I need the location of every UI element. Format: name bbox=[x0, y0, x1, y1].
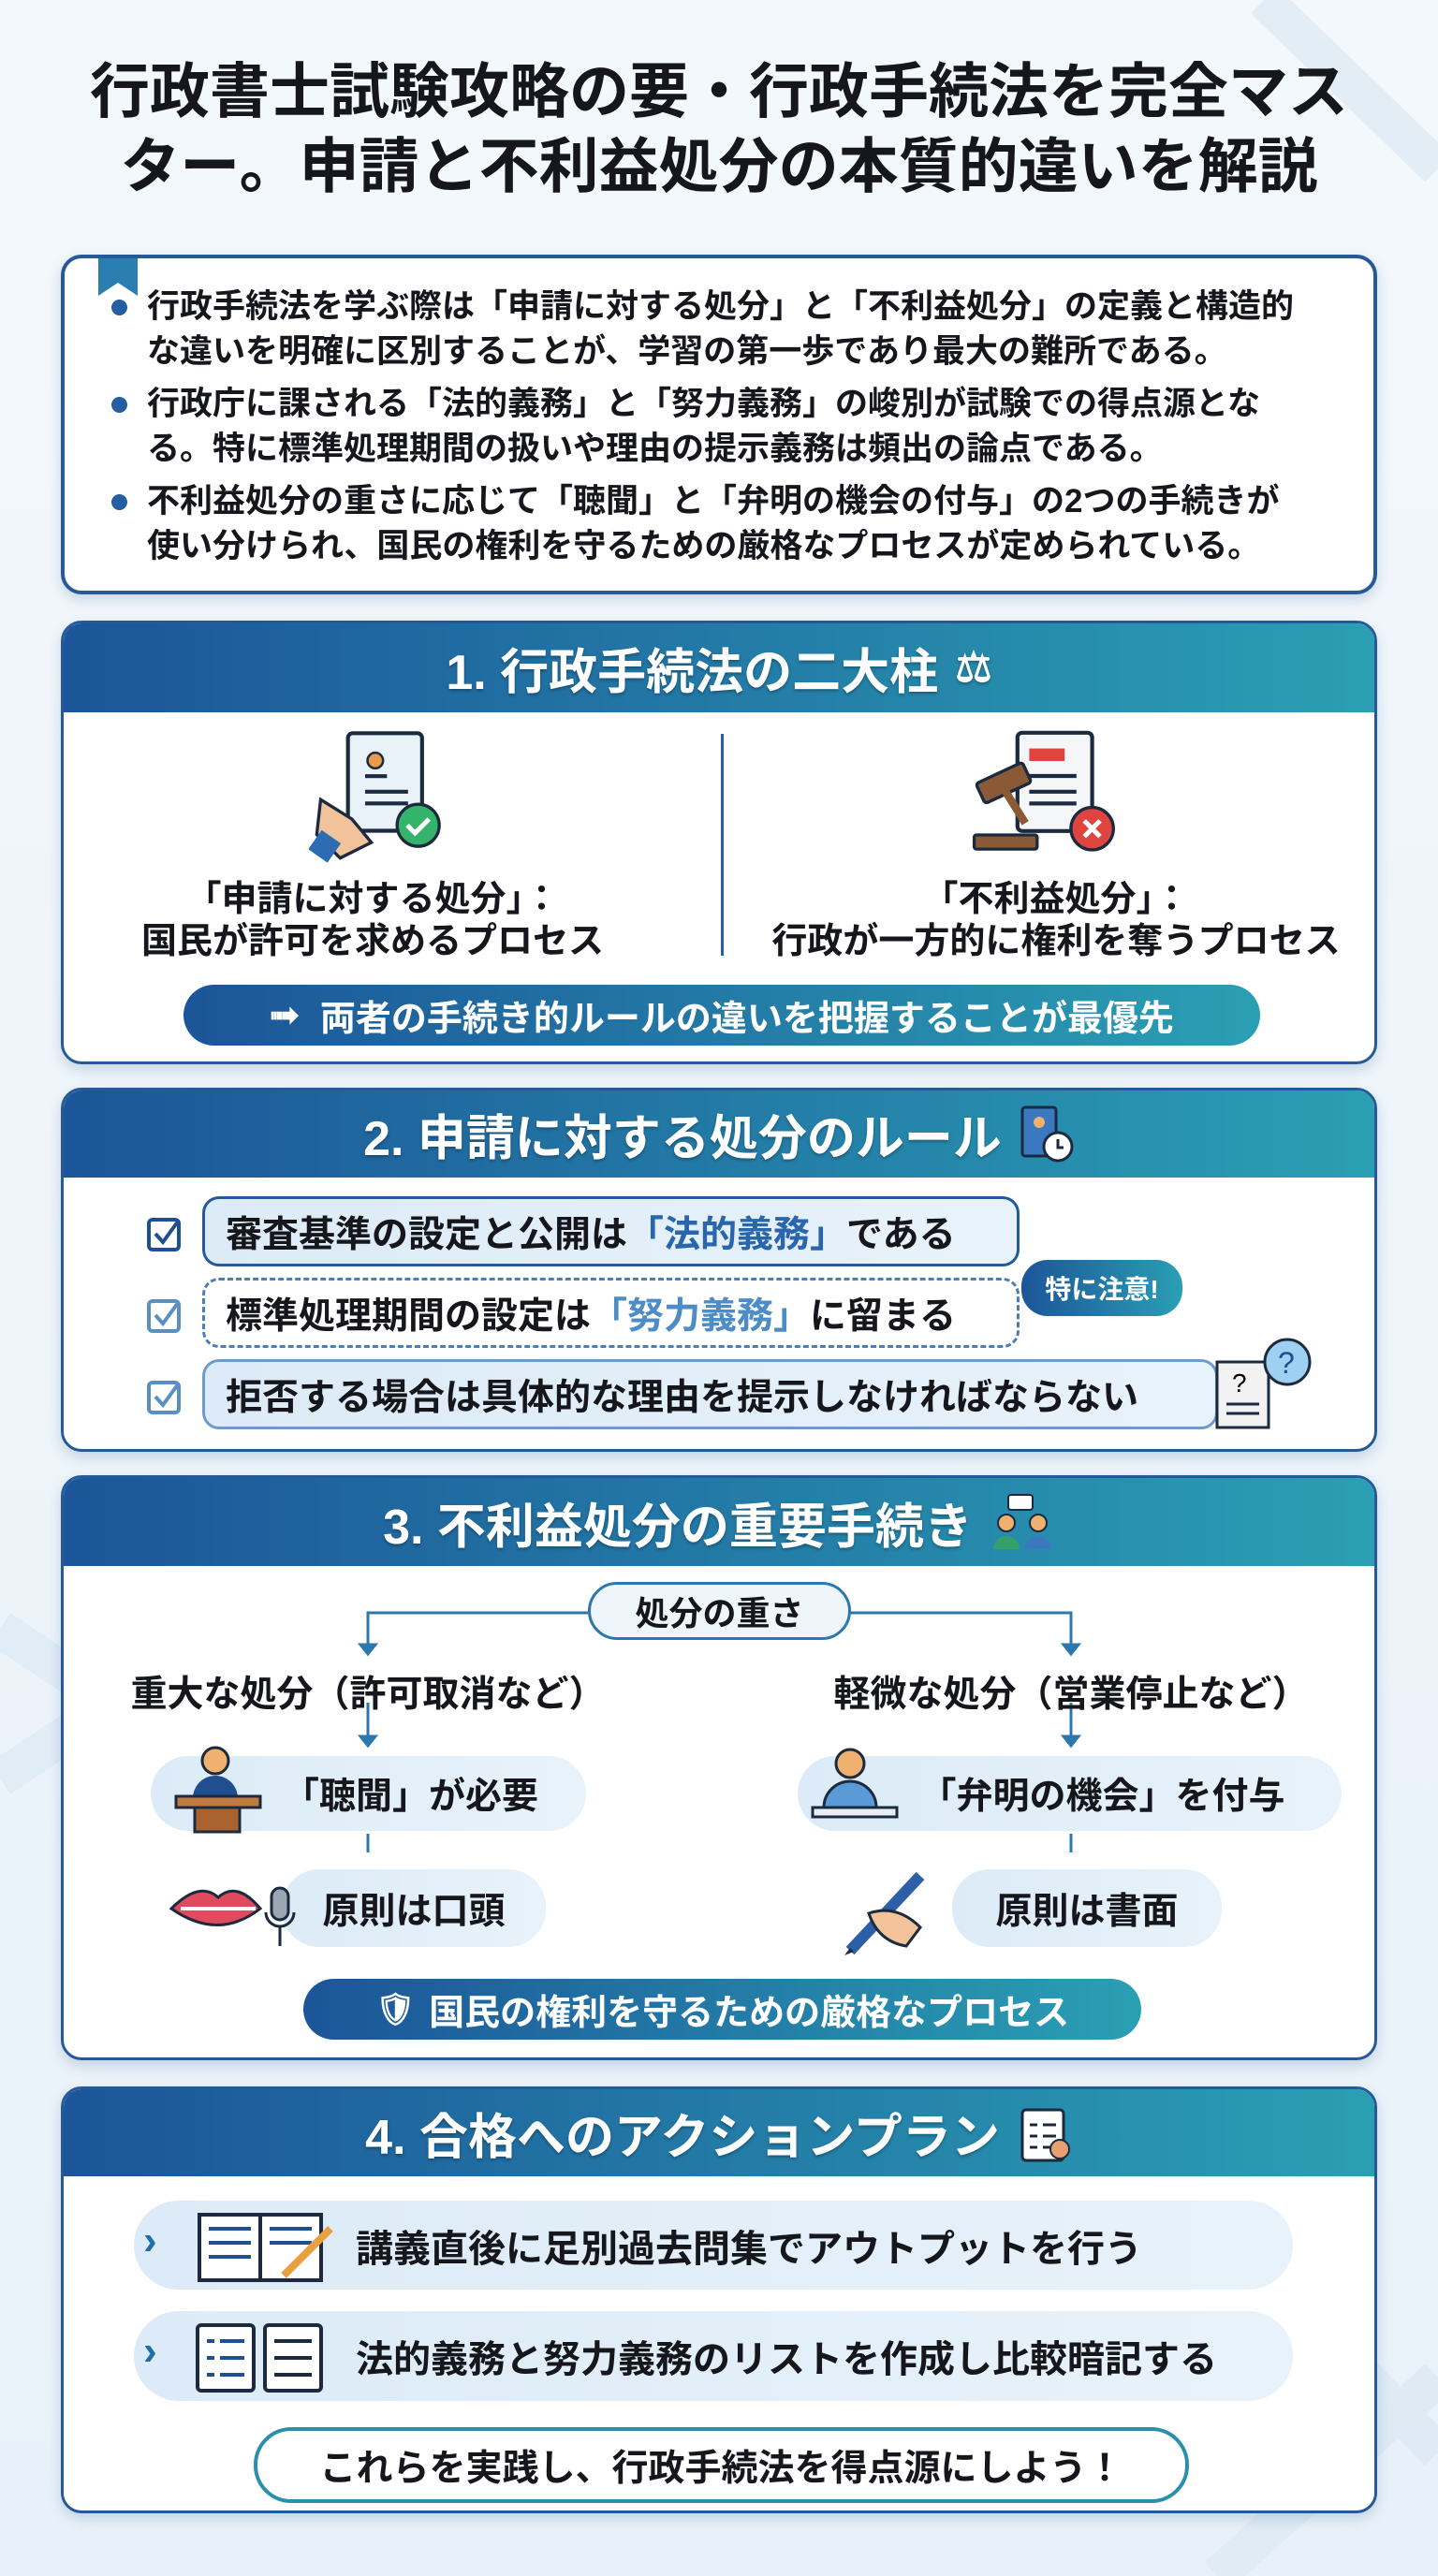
summary bullets bbox=[111, 288, 1294, 564]
callout: special attention bbox=[1021, 1260, 1182, 1316]
heading 2 bbox=[64, 1090, 1374, 1178]
written pill: 原則は書面 bbox=[995, 1891, 1178, 1932]
heading 1: ⚖ bbox=[955, 645, 992, 691]
icon: bookmark bbox=[98, 258, 138, 296]
text: serious disposition: 重大な処分（許可取消など） bbox=[130, 1675, 605, 1715]
summary bullets: 使い分けられ、国民の権利を守るための厳格なプロセスが定められている。 bbox=[147, 528, 1260, 564]
panel: section 2 bbox=[61, 1088, 1377, 1452]
callout pill: 両者の手続き的ルールの違いを把握することが最優先 bbox=[320, 1000, 1174, 1039]
rights pill bbox=[303, 1979, 1141, 2040]
summary bullets: な違いを明確に区別することが、学習の第一歩であり最大の難所である。 bbox=[147, 333, 1227, 370]
rights pill: 🛡 bbox=[375, 1992, 416, 2027]
explanation pill: 「弁明の機会」を付与 bbox=[919, 1777, 1284, 1817]
text: disadvantageous caption: 「不利益処分」： bbox=[922, 880, 1189, 919]
rights pill: 国民の権利を守るための厳格なプロセス bbox=[429, 1994, 1069, 2033]
hearing pill bbox=[151, 1756, 586, 1831]
rule 2: 「努力義務」 bbox=[591, 1295, 810, 1337]
action 1: › bbox=[143, 2217, 157, 2263]
icon: pen hand bbox=[844, 1872, 925, 1955]
icon: person writing bbox=[811, 1749, 899, 1818]
heading 2: 2. 申請に対する処分のルール bbox=[363, 1112, 1002, 1166]
heading 4 bbox=[64, 2089, 1374, 2176]
icon: lips and mic bbox=[169, 1887, 296, 1946]
panel: section 1 bbox=[61, 621, 1377, 1064]
conclusion pill: これらを実践し、行政手続法を得点源にしよう！ bbox=[319, 2449, 1123, 2488]
oral pill: 原則は口頭 bbox=[322, 1891, 506, 1932]
panel: section 4 bbox=[61, 2086, 1377, 2513]
oral pill bbox=[282, 1869, 546, 1947]
written pill bbox=[952, 1869, 1222, 1947]
heading 3 bbox=[64, 1478, 1374, 1566]
weight pill bbox=[588, 1582, 851, 1640]
title: 行政書士試験攻略の要・行政手続法を完全マス bbox=[90, 58, 1348, 125]
hearing pill: 「聴聞」が必要 bbox=[283, 1777, 538, 1817]
title: ター。申請と不利益処分の本質的違いを解説 bbox=[120, 133, 1318, 200]
callout: special attention: 特に注意! bbox=[1045, 1275, 1159, 1304]
icon: checklist bbox=[1020, 2108, 1070, 2162]
heading 1 bbox=[64, 623, 1374, 712]
icon: question document: ? bbox=[1278, 1346, 1295, 1380]
icon: gavel document bbox=[972, 730, 1115, 852]
text: disadvantageous caption bbox=[771, 880, 1341, 961]
icon: question document: ? bbox=[1232, 1368, 1247, 1398]
icon: question document bbox=[1215, 1339, 1311, 1428]
text: application caption: 国民が許可を求めるプロセス bbox=[141, 922, 604, 961]
rule 3: 拒否する場合は具体的な理由を提示しなければならない bbox=[226, 1378, 1138, 1417]
icon: open book bbox=[198, 2213, 333, 2282]
summary bullets: る。特に標準処理期間の扱いや理由の提示義務は頻出の論点である。 bbox=[147, 431, 1163, 467]
panel: section 3 bbox=[61, 1475, 1377, 2060]
action 2: › bbox=[143, 2328, 157, 2374]
icon: lists bbox=[196, 2323, 323, 2393]
action 1: 講義直後に足別過去問集でアウトプットを行う bbox=[356, 2228, 1142, 2269]
heading 3: 3. 不利益処分の重要手続き bbox=[383, 1500, 973, 1554]
action 1 bbox=[134, 2201, 1293, 2290]
text: application caption bbox=[141, 880, 604, 961]
action 2 bbox=[134, 2311, 1293, 2401]
rule 3 bbox=[147, 1359, 1215, 1429]
divider bbox=[721, 734, 724, 956]
callout pill: ➟ bbox=[270, 996, 300, 1035]
flow connectors bbox=[358, 1612, 1081, 1852]
icon: application document bbox=[309, 731, 441, 863]
icon: people bbox=[993, 1494, 1051, 1549]
text: minor disposition: 軽微な処分（営業停止など） bbox=[833, 1675, 1309, 1715]
title bbox=[90, 58, 1348, 200]
rule 1 bbox=[147, 1196, 1020, 1266]
summary bullets: 行政庁に課される「法的義務」と「努力義務」の峻別が試験での得点源とな bbox=[147, 386, 1260, 422]
explanation pill bbox=[798, 1756, 1342, 1831]
rule 2: 標準処理期間の設定は に留まる bbox=[226, 1295, 956, 1337]
icon: speaker podium bbox=[174, 1747, 262, 1833]
summary bullets: 行政手続法を学ぶ際は「申請に対する処分」と「不利益処分」の定義と構造的 bbox=[147, 288, 1294, 325]
text: disadvantageous caption: 行政が一方的に権利を奪うプロセス bbox=[771, 922, 1341, 961]
panel: summary bbox=[61, 255, 1377, 594]
weight pill: 処分の重さ bbox=[635, 1594, 803, 1632]
text: application caption: 「申請に対する処分」： bbox=[185, 880, 560, 919]
rule 2 bbox=[147, 1278, 1020, 1348]
heading 4: 4. 合格へのアクションプラン bbox=[365, 2111, 1000, 2165]
action 2: 法的義務と努力義務のリストを作成し比較暗記する bbox=[356, 2339, 1217, 2380]
summary bullets: 不利益処分の重さに応じて「聴聞」と「弁明の機会の付与」の2つの手続きが bbox=[147, 483, 1279, 520]
conclusion pill bbox=[254, 2427, 1189, 2503]
heading 1: 1. 行政手続法の二大柱 bbox=[446, 646, 938, 700]
icon: book clock bbox=[1020, 1106, 1073, 1163]
rule 1: 審査基準の設定と公開は である bbox=[226, 1215, 956, 1254]
callout pill bbox=[183, 985, 1260, 1046]
rule 1: 「法的義務」 bbox=[627, 1215, 846, 1254]
